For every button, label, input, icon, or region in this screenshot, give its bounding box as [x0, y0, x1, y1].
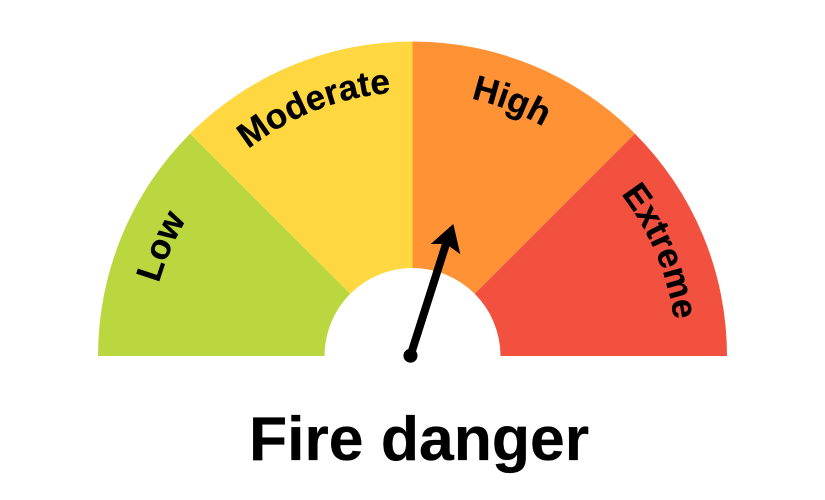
gauge dial [98, 41, 727, 356]
title: Fire danger [249, 405, 589, 474]
label: High: High [473, 76, 548, 126]
segment: moderate [190, 41, 412, 294]
needle arrow [404, 224, 460, 363]
segment: high [412, 42, 635, 294]
label: Extreme: Extreme [622, 182, 692, 318]
segment: low [98, 134, 350, 356]
segment: extreme [475, 134, 727, 356]
label: Moderate: Moderate [236, 73, 390, 148]
label: Low: Low [136, 210, 184, 282]
